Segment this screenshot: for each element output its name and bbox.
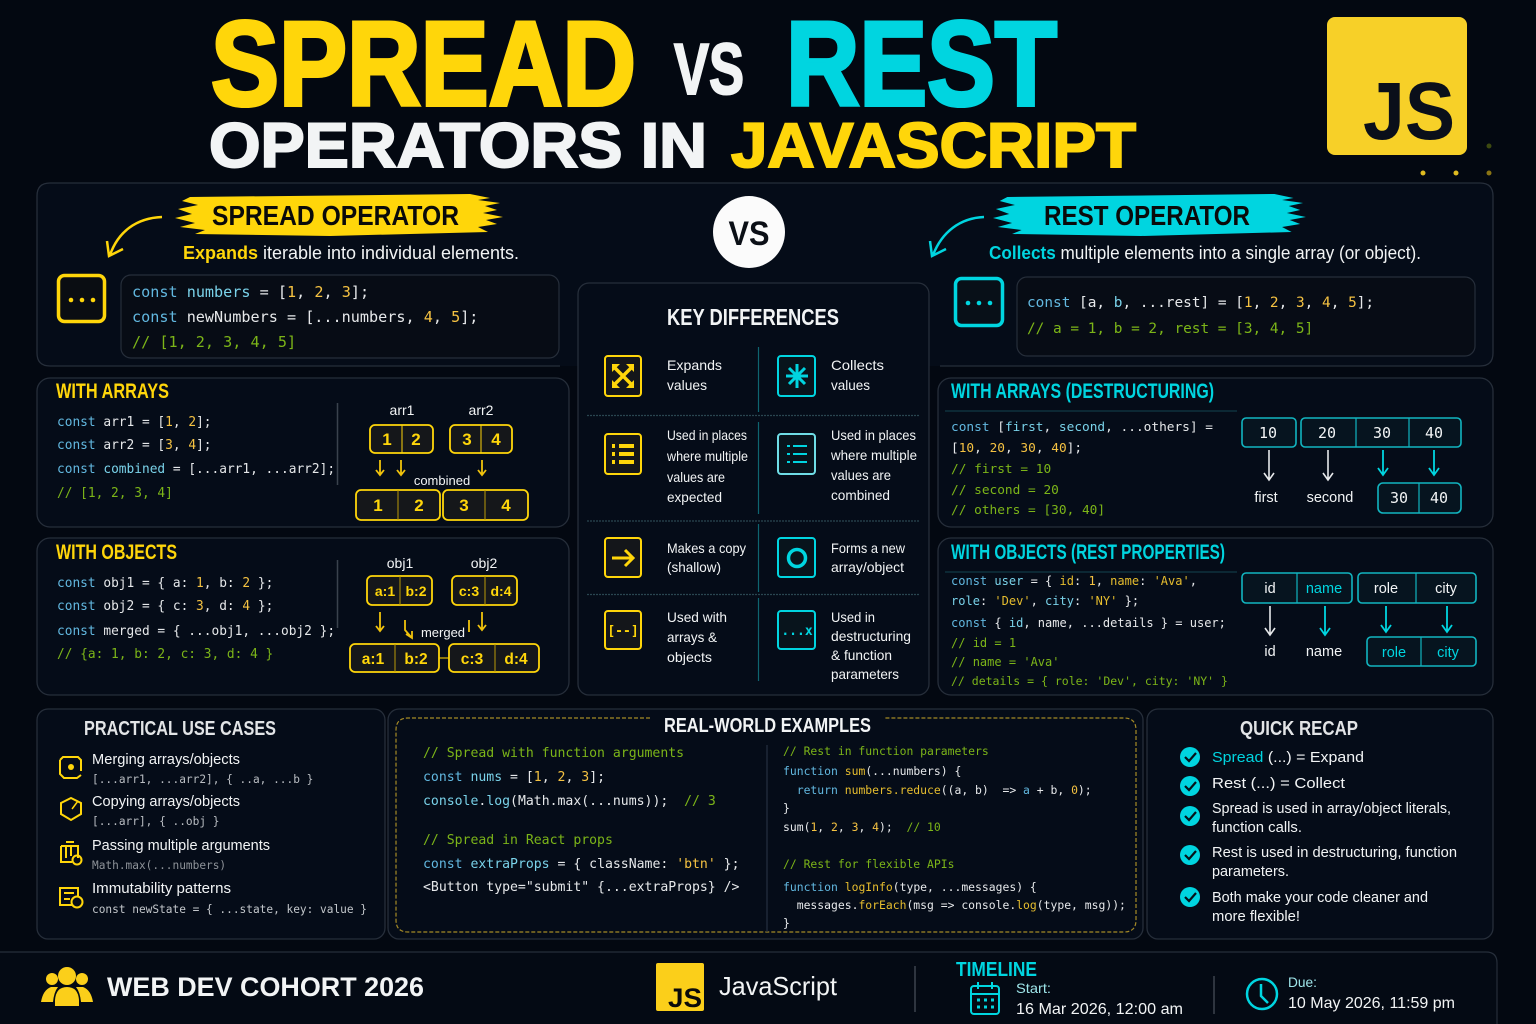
diagram: objects merged: a:1 <box>375 583 395 599</box>
text: used in places, spread: where multiple <box>666 448 748 464</box>
code: rest examples: messages.forEach(msg => console.log(type, msg)); <box>783 898 1126 912</box>
title: SPREAD <box>211 0 636 131</box>
code: rest properties: // name = 'Ava' <box>951 655 1060 669</box>
panel: rest operator <box>930 194 1475 356</box>
use case: merging <box>60 752 313 786</box>
diagram: array destructuring: 40 <box>1430 489 1448 507</box>
text: expands values: values <box>667 377 707 393</box>
code: rest properties: // details = { role: 'Dev', city: 'NY' } <box>951 674 1228 688</box>
diagram: arrays merged: 3 <box>459 496 469 515</box>
JavaScript label: JavaScript <box>719 971 838 1001</box>
heading: practical use cases: PRACTICAL USE CASES <box>84 718 276 740</box>
heading: with arrays: WITH ARRAYS <box>56 380 169 403</box>
text: makes a copy: (shallow) <box>667 559 721 575</box>
text: used in places, rest: where multiple <box>830 447 917 463</box>
use case: passing arguments: Math.max(...numbers) <box>92 859 226 872</box>
diagram: arrays merged: arr2 <box>469 402 494 418</box>
diagram: arrays merged: 3 <box>462 430 472 449</box>
panel: spread operator <box>58 194 559 358</box>
panel: with objects (spread) <box>37 538 569 695</box>
code: spread examples: // Spread in React props <box>423 833 613 848</box>
use case: immutability: Immutability patterns <box>92 881 231 897</box>
arrow: spread <box>107 217 162 256</box>
diagram: arrays merged: 1 <box>382 430 392 449</box>
VS badge: VS <box>728 215 770 253</box>
due date: Due: <box>1288 974 1317 990</box>
diagram: array destructuring: 30 <box>1373 424 1391 442</box>
code: destructuring: [10, 20, 30, 40]; <box>951 441 1082 456</box>
code block: rest: const [a, b, ...rest] = [1, 2, 3, 4, 5]; <box>1027 295 1374 311</box>
recap text: more flexible! <box>1212 909 1300 925</box>
text: collects values: Collects <box>831 357 884 373</box>
code: rest properties: const { id, name, ...details } = user; <box>951 616 1226 630</box>
title <box>209 0 1136 181</box>
code block: spread: // [1, 2, 3, 4, 5] <box>132 333 296 351</box>
text: used in places, spread: values are <box>667 469 725 485</box>
text: used in places, spread: Used in places <box>667 427 747 443</box>
panel: practical use cases <box>37 709 385 939</box>
timeline heading: TIMELINE <box>956 959 1037 981</box>
icon: expand <box>605 356 641 396</box>
icon: circle <box>778 538 815 577</box>
title: JAVASCRIPT <box>731 111 1136 181</box>
panel: with objects (rest properties) <box>938 538 1493 695</box>
diagram: array destructuring: 40 <box>1425 424 1443 442</box>
icon: brackets: [--] <box>607 624 639 639</box>
footer bar <box>0 952 1497 1024</box>
icon: list cyan <box>778 434 815 474</box>
code: with objects: const obj2 = { c: 3, d: 4 }; <box>57 599 273 614</box>
text: used in destructuring: destructuring <box>831 628 911 644</box>
text: makes a copy <box>667 540 746 575</box>
use case: merging: [...arr1, ...arr2], { ..a, ...b } <box>92 773 313 786</box>
code: rest examples: return numbers.reduce((a, b) => a + b, 0); <box>783 783 1092 797</box>
code: spread examples: // Spread with function arguments <box>423 746 684 761</box>
brush heading: spread operator: SPREAD OPERATOR <box>212 200 459 231</box>
diagram: arrays merged: 2 <box>414 496 424 515</box>
diagram: object destructuring: city <box>1437 645 1460 661</box>
title: REST <box>786 0 1057 131</box>
text: collects values: values <box>831 377 870 393</box>
text: collects values <box>831 357 884 393</box>
diagram: objects merged: obj1 <box>387 555 413 571</box>
text: expands values <box>667 357 722 393</box>
diagram: array destructuring: first <box>1254 490 1278 506</box>
code: rest examples: function sum(...numbers) { <box>783 764 961 778</box>
due date: 10 May 2026, 11:59 pm <box>1288 995 1455 1012</box>
diagram: arrays merged: 1 <box>373 496 383 515</box>
diagram: object destructuring: id <box>1264 581 1276 597</box>
diagram: arrays merged: 4 <box>491 430 501 449</box>
icon: dots x: ...x <box>781 624 813 639</box>
recap text <box>1212 750 1457 925</box>
icon: cohort people <box>41 967 93 1006</box>
brush heading: rest operator <box>993 194 1306 236</box>
diagram: arrays merged: arr1 <box>390 402 415 418</box>
diagram: arrays merged: combined <box>414 473 470 488</box>
icon: brackets <box>605 611 641 649</box>
text: makes a copy: Makes a copy <box>667 540 746 556</box>
code: destructuring: // second = 20 <box>951 483 1059 498</box>
heading: with objects: WITH OBJECTS <box>56 541 177 564</box>
use case: immutability: const newState = { ...state, key: value } <box>92 903 367 916</box>
start date: 16 Mar 2026, 12:00 am <box>1016 1001 1183 1018</box>
text: used in destructuring <box>831 609 911 682</box>
diagram: objects merged: b:2 <box>406 583 427 599</box>
diagram: array destructuring: 20 <box>1318 424 1336 442</box>
diagram: objects merged: b:2 <box>404 651 428 668</box>
start date <box>1016 980 1183 1018</box>
icon: spread dots <box>58 276 104 322</box>
text: used in places, rest: Used in places <box>831 427 916 443</box>
diagram: object destructuring: name <box>1306 644 1342 660</box>
code: rest examples: // Rest in function parameters <box>783 744 989 758</box>
text: forms a new: Forms a new <box>831 540 906 556</box>
code: with objects <box>57 576 335 662</box>
code: spread examples: const extraProps = { className: 'btn' }; <box>423 857 740 872</box>
code: spread examples: console.log(Math.max(...nums)); // 3 <box>423 794 716 809</box>
panel: real-world examples <box>388 709 1143 939</box>
text: used with arrays: Used with <box>667 609 727 625</box>
recap text: Rest (...) = Collect <box>1212 776 1345 792</box>
row 2: used in places <box>605 427 917 505</box>
diagram: array destructuring <box>1242 418 1461 513</box>
diagram: object destructuring: name <box>1306 581 1342 597</box>
diagram: objects merged: a:1 <box>362 651 385 668</box>
recap text: Rest is used in destructuring, function <box>1212 845 1457 861</box>
icon: JS small: JS <box>668 983 702 1013</box>
code: spread examples <box>423 746 740 895</box>
diagram: object destructuring: id <box>1264 644 1276 660</box>
code: rest examples: } <box>783 916 790 930</box>
diagram: object destructuring: role <box>1382 645 1406 661</box>
heading: quick recap: QUICK RECAP <box>1240 718 1358 740</box>
diagram: objects merged: c:3 <box>459 583 479 599</box>
code: rest examples: function logInfo(type, ...messages) { <box>783 880 1037 894</box>
recap text: parameters. <box>1212 864 1289 880</box>
code: rest examples: } <box>783 801 790 815</box>
diagram: array destructuring: 30 <box>1390 489 1408 507</box>
use case: immutability <box>60 881 367 916</box>
text: used in destructuring: parameters <box>831 666 899 682</box>
use case: passing arguments <box>61 838 270 872</box>
code: with arrays <box>57 415 335 501</box>
icon: list yellow <box>605 434 641 474</box>
diagram: objects merged: obj2 <box>471 555 497 571</box>
code: rest examples <box>783 744 1126 930</box>
text: used in places, rest: combined <box>831 487 890 503</box>
heading: with objects rest: WITH OBJECTS (REST PROPERTIES) <box>951 541 1225 564</box>
brush heading: rest operator: REST OPERATOR <box>1044 200 1250 231</box>
cohort name: WEB DEV COHORT 2026 <box>107 972 424 1002</box>
text: used in destructuring: & function <box>831 647 892 663</box>
icon: JS logo <box>1327 17 1492 176</box>
code: rest properties: role: 'Dev', city: 'NY' }; <box>951 594 1139 608</box>
icon: collect <box>778 356 815 396</box>
text: used in places, rest: values are <box>831 467 891 483</box>
diagram: objects merged <box>350 555 539 672</box>
title: VS <box>674 30 744 110</box>
code block: rest: // a = 1, b = 2, rest = [3, 4, 5] <box>1027 321 1313 337</box>
text: forms a new: array/object <box>831 559 904 575</box>
text: used in places, spread <box>666 427 748 505</box>
code: rest examples: // Rest for flexible APIs <box>783 857 954 871</box>
panel: quick recap <box>1147 709 1493 939</box>
row 3: copy vs new <box>605 538 906 577</box>
icon: arrow <box>605 538 641 577</box>
code: destructuring: // first = 10 <box>951 462 1051 477</box>
code: spread examples: const nums = [1, 2, 3]; <box>423 770 605 785</box>
code block: spread: const numbers = [1, 2, 3]; <box>132 283 369 301</box>
panel: with arrays (spread) <box>37 378 569 527</box>
diagram: object destructuring: city <box>1435 581 1458 597</box>
due date <box>1288 974 1455 1012</box>
code: with objects: const obj1 = { a: 1, b: 2 }; <box>57 576 273 591</box>
use case: copying: [...arr], { ..obj } <box>92 815 219 828</box>
use case: copying: Copying arrays/objects <box>92 794 240 810</box>
text: used with arrays: objects <box>667 649 712 665</box>
checklist icons <box>1180 747 1200 907</box>
panel: operators header frame <box>37 183 1493 366</box>
row 1: expands vs collects <box>605 356 884 396</box>
arrow: rest <box>930 217 984 256</box>
code: rest properties <box>951 574 1228 688</box>
panel: with arrays (destructuring) <box>938 378 1493 527</box>
icon: JS small <box>656 963 704 1013</box>
diagram: array destructuring: second <box>1307 490 1353 506</box>
code: rest properties: const user = { id: 1, name: 'Ava', <box>951 574 1197 588</box>
diagram: object destructuring <box>1242 573 1476 666</box>
heading: key differences: KEY DIFFERENCES <box>667 304 839 330</box>
code block: spread: const newNumbers = [...numbers, 4, 5]; <box>132 308 478 326</box>
panel: key differences <box>578 283 929 695</box>
diagram: arrays merged: 2 <box>411 430 421 449</box>
title: OPERATORS IN <box>209 111 707 181</box>
start date: Start: <box>1016 980 1051 996</box>
icon: rest dots <box>956 278 1002 326</box>
text: used in destructuring: Used in <box>831 609 875 625</box>
code: destructuring <box>951 420 1213 518</box>
code: spread examples: <Button type="submit" {...extraProps} /> <box>423 880 740 895</box>
code: with arrays: const combined = [...arr1, ...arr2]; <box>57 462 335 477</box>
code: with arrays: const arr1 = [1, 2]; <box>57 415 212 430</box>
use case: passing arguments: Passing multiple arguments <box>92 838 270 854</box>
diagram: objects merged: merged <box>421 625 465 640</box>
code block: spread <box>121 275 559 358</box>
recap text: Spread is used in array/object literals, <box>1212 801 1451 817</box>
heading: real-world examples: REAL-WORLD EXAMPLES <box>664 715 871 737</box>
diagram: arrays merged <box>356 402 528 520</box>
code block: rest <box>1017 277 1475 356</box>
rest description: Collects multiple elements into a single array (or object). <box>989 243 1421 263</box>
code: rest examples: sum(1, 2, 3, 4); // 10 <box>783 820 941 834</box>
icon: calendar <box>971 982 999 1014</box>
text: used in places, rest <box>830 427 917 503</box>
diagram: array destructuring: 10 <box>1259 424 1277 442</box>
code: with arrays: const arr2 = [3, 4]; <box>57 438 212 453</box>
code: destructuring: // others = [30, 40] <box>951 503 1105 518</box>
recap text: Spread (...) = Expand <box>1212 750 1364 766</box>
code: rest properties: // id = 1 <box>951 636 1016 650</box>
diagram: object destructuring: role <box>1374 581 1398 597</box>
icon: JS logo: JS <box>1363 66 1455 157</box>
recap text: function calls. <box>1212 820 1302 836</box>
diagram: objects merged: d:4 <box>504 651 528 668</box>
code: with objects: // {a: 1, b: 2, c: 3, d: 4 } <box>57 647 273 662</box>
recap text: Both make your code cleaner and <box>1212 890 1428 906</box>
code: with objects: const merged = { ...obj1, ...obj2 }; <box>57 624 335 639</box>
text: used with arrays: arrays & <box>667 629 718 645</box>
text: used in places, spread: expected <box>667 489 722 505</box>
icon: clock <box>1247 979 1277 1009</box>
use case: copying <box>61 794 240 828</box>
code: with arrays: // [1, 2, 3, 4] <box>57 486 173 501</box>
diagram: objects merged: d:4 <box>490 583 512 599</box>
text: forms a new <box>831 540 906 575</box>
code: destructuring: const [first, second, ...others] = <box>951 420 1213 435</box>
brush heading: spread operator <box>175 194 503 236</box>
VS badge <box>713 196 785 268</box>
icon: dots x <box>778 611 815 649</box>
text: expands values: Expands <box>667 357 722 373</box>
heading: with arrays destructuring: WITH ARRAYS (DESTRUCTURING) <box>951 380 1214 403</box>
use case: merging: Merging arrays/objects <box>92 752 240 768</box>
diagram: objects merged: c:3 <box>461 651 484 668</box>
row 4: used with vs destructuring <box>605 609 911 682</box>
diagram: arrays merged: 4 <box>501 496 511 515</box>
text: used with arrays <box>667 609 727 665</box>
spread description: Expands iterable into individual elements. <box>183 243 519 263</box>
